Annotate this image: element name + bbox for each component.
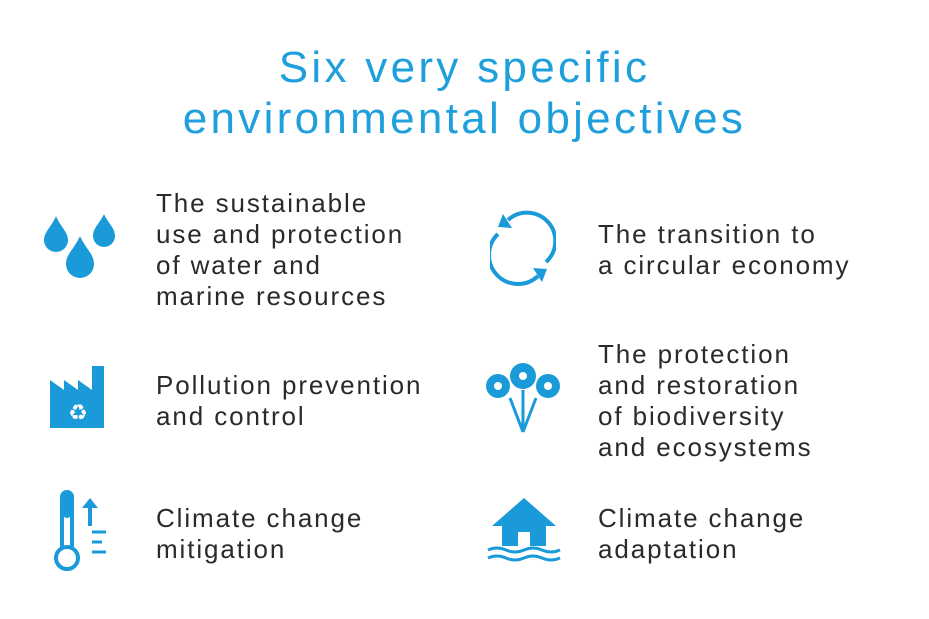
text: water: use and protection [156,219,404,249]
icon: flooded house [487,498,561,562]
text: water: of water and [156,250,322,280]
icon: factory: ♻ [68,401,88,426]
text: circular: a circular economy [598,250,850,280]
text: pollution: Pollution prevention [156,370,422,400]
text: water [156,188,404,311]
text: circular [598,219,850,280]
title: environmental objectives [183,94,746,143]
text: pollution: and control [156,401,306,431]
text: pollution [156,370,422,431]
text: biodiversity: and restoration [598,370,800,400]
icon: factory [50,366,104,428]
title: Six very specific [279,43,650,92]
text: adaptation: adaptation [598,534,738,564]
icon: circular arrows [490,210,556,286]
icon: flowers [486,363,560,432]
text: adaptation [598,503,805,564]
text: biodiversity: and ecosystems [598,432,812,462]
text: mitigation: Climate change [156,503,363,533]
icon: water drops [44,214,115,278]
text: water: The sustainable [156,188,368,218]
text: adaptation: Climate change [598,503,805,533]
text: biodiversity: of biodiversity [598,401,785,431]
text: biodiversity: The protection [598,339,791,369]
text: water: marine resources [156,281,387,311]
text: circular: The transition to [598,219,817,249]
icon: thermometer [54,490,106,571]
text: mitigation: mitigation [156,534,286,564]
text: biodiversity [598,339,812,462]
title [183,43,746,143]
text: mitigation [156,503,363,564]
